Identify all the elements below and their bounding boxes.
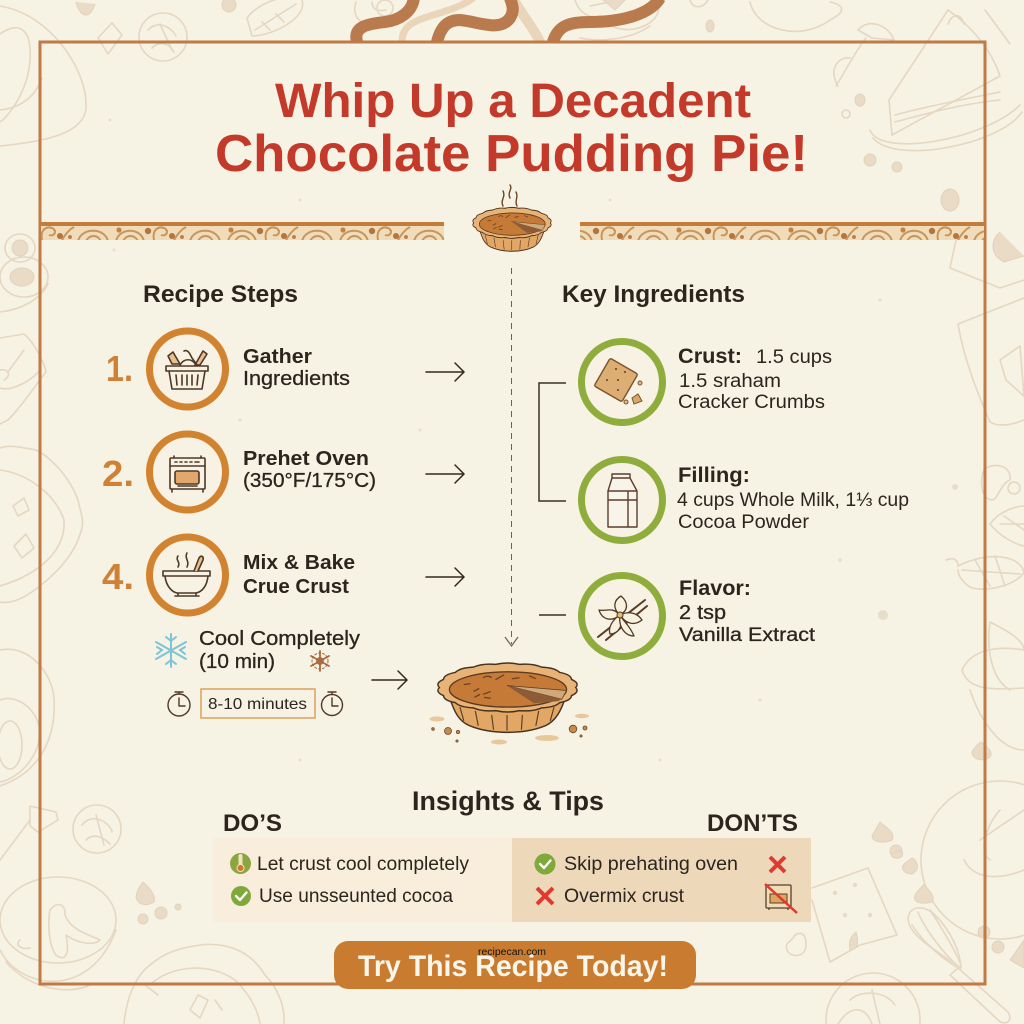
icon: check [534, 854, 556, 874]
cooling note: (10 min) [199, 651, 275, 673]
panel: don'ts: Overmix crust [564, 886, 685, 907]
panel: don'ts: DON’TS [707, 810, 798, 837]
call to action button: Try This Recipe Today! [358, 950, 668, 983]
step 2: (350°F/175°C) [243, 470, 376, 492]
illustration: finished pie [430, 663, 589, 744]
step 2: 2. [102, 453, 134, 494]
ingredient: filling: 4 cups Whole Milk, 1⅓ cup [677, 490, 909, 511]
ingredient: flavor: Flavor: [679, 577, 751, 600]
step 2: Prehet Oven [243, 448, 369, 470]
icon: stopwatch right [322, 692, 342, 716]
panel: don'ts [512, 810, 811, 922]
banner: left [41, 222, 444, 240]
ingredient: flavor: 2 tsp [679, 602, 726, 624]
ingredient: filling [582, 460, 909, 540]
doodle: bottom right cracker chips whisk bowl [786, 851, 1024, 1024]
step 3: Mix & Bake [243, 552, 355, 574]
ingredient: crust: Cracker Crumbs [678, 392, 825, 413]
panel: do's [213, 810, 512, 922]
heading: key ingredients: Key Ingredients [562, 281, 745, 308]
connector bracket [539, 383, 566, 615]
icon: check [231, 886, 251, 906]
icon: stopwatch left [168, 692, 190, 716]
icon: red cross [537, 888, 553, 904]
step 2 [102, 434, 376, 510]
icon: graham cracker [594, 358, 642, 404]
arrows from steps [372, 363, 464, 689]
ingredient: crust: 1.5 sraham [679, 371, 781, 392]
timer [168, 689, 342, 718]
ingredient: flavor: Vanilla Extract [679, 625, 816, 646]
timer: 8-10 minutes [208, 696, 307, 713]
icon: snowflake [156, 634, 186, 667]
icon: small steaming pie [473, 185, 551, 251]
doodle: top right pie slice on plate [690, 0, 1022, 211]
step 1: 1. [106, 348, 133, 389]
call to action button [334, 941, 696, 989]
title: Whip Up a Decadent [275, 75, 751, 128]
panel: do's: Use unsseunted cocoa [259, 886, 453, 907]
doodle: left column rolls bread pie bun spoon cookie [0, 234, 121, 860]
panel: recipe steps [102, 281, 376, 718]
heading: recipe steps: Recipe Steps [143, 281, 298, 308]
icon: crossed-out oven [765, 884, 797, 913]
icon: thermometer [230, 853, 251, 874]
icon: red cross [770, 857, 785, 872]
icon: brown snowflake [311, 651, 329, 671]
title: Chocolate Pudding Pie! [215, 125, 808, 183]
ingredient: filling: Cocoa Powder [678, 512, 810, 533]
call to action button: recipecan.com [478, 947, 546, 958]
title [215, 75, 808, 183]
ingredient: flavor [582, 576, 816, 656]
doodle: top chocolate ribbons [356, 0, 660, 42]
icon: vanilla flower [598, 596, 647, 640]
banner: right [580, 222, 984, 240]
cooling note: Cool Completely [199, 628, 360, 650]
step 1: Gather [243, 346, 312, 368]
step 1 [106, 331, 350, 407]
panel: insights and tips [213, 786, 811, 922]
panel: do's: DO’S [223, 810, 282, 837]
panel: don'ts: Skip prehating oven [564, 854, 738, 875]
cooling note [156, 628, 360, 673]
doodle: bottom left bowl drops pie [0, 877, 284, 1024]
ingredient: crust: Crust: [678, 345, 742, 368]
step 3: Crue Crust [243, 576, 349, 598]
doodle: top left plate and treats [0, 0, 303, 146]
panel: key ingredients [539, 281, 909, 656]
panel: do's: Let crust cool completely [257, 854, 470, 875]
step 3: 4. [102, 556, 134, 597]
step 1: Ingredients [243, 368, 350, 390]
doodle: top centre pastry [355, 0, 659, 40]
doodle: right column crackers nuts bowl plate [872, 232, 1024, 939]
step 3 [102, 537, 355, 613]
ingredient: filling: Filling: [678, 464, 750, 487]
ingredient: crust: 1.5 cups [756, 347, 832, 368]
paper speckles [108, 118, 958, 762]
heading: insights and tips: Insights & Tips [412, 786, 604, 816]
ingredient: crust [582, 342, 832, 422]
dashed divider with arrow [505, 268, 518, 646]
icon: milk carton [608, 474, 637, 527]
